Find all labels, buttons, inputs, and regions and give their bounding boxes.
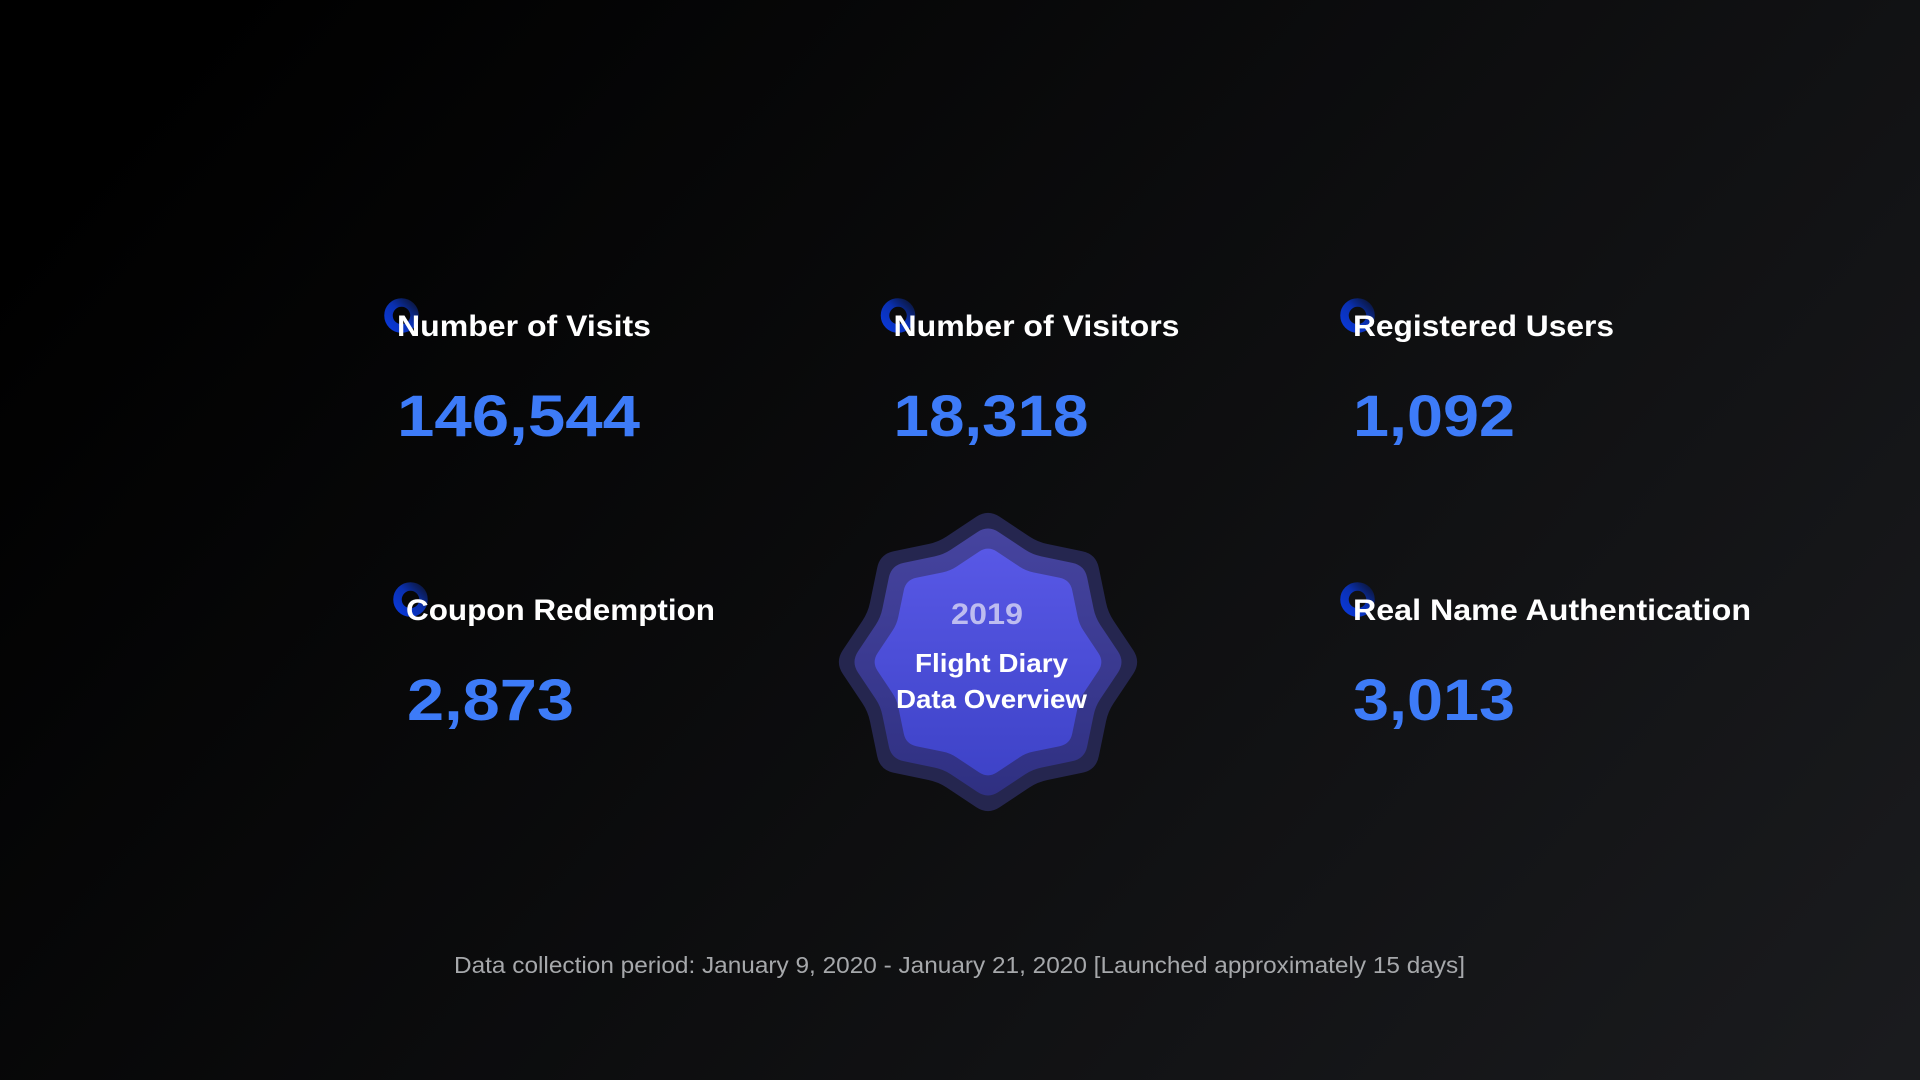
label: Number of Visits (397, 310, 651, 343)
icon: ring (885, 302, 911, 328)
badge title (896, 648, 1088, 714)
stat: real name authentication (1344, 586, 1751, 733)
badge title: Data Overview (896, 684, 1088, 714)
stat: number of visitors (885, 302, 1180, 449)
value: 146,544 (397, 384, 640, 449)
label: Real Name Authentication (1353, 594, 1751, 627)
stat: coupon redemption (398, 586, 715, 733)
value: 18,318 (894, 384, 1088, 449)
stat: registered users (1344, 302, 1614, 449)
badge middle layer (855, 529, 1121, 795)
badge outer layer (839, 513, 1137, 811)
icon: ring (1344, 586, 1370, 612)
label: Number of Visitors (894, 310, 1180, 343)
footnote: Data collection period: January 9, 2020 - January 21, 2020 [Launched approximately 15 days] (454, 952, 1465, 978)
stat: number of visits (388, 302, 651, 449)
badge title: Flight Diary (915, 648, 1069, 678)
icon: ring (388, 302, 414, 328)
label: Coupon Redemption (406, 594, 715, 627)
value: 3,013 (1353, 668, 1515, 733)
value: 1,092 (1353, 384, 1515, 449)
icon: ring (398, 586, 424, 612)
central badge (839, 513, 1137, 811)
badge year: 2019 (951, 598, 1023, 631)
badge inner layer (875, 549, 1101, 775)
value: 2,873 (407, 668, 574, 733)
label: Registered Users (1353, 310, 1614, 343)
icon: ring (1344, 302, 1370, 328)
